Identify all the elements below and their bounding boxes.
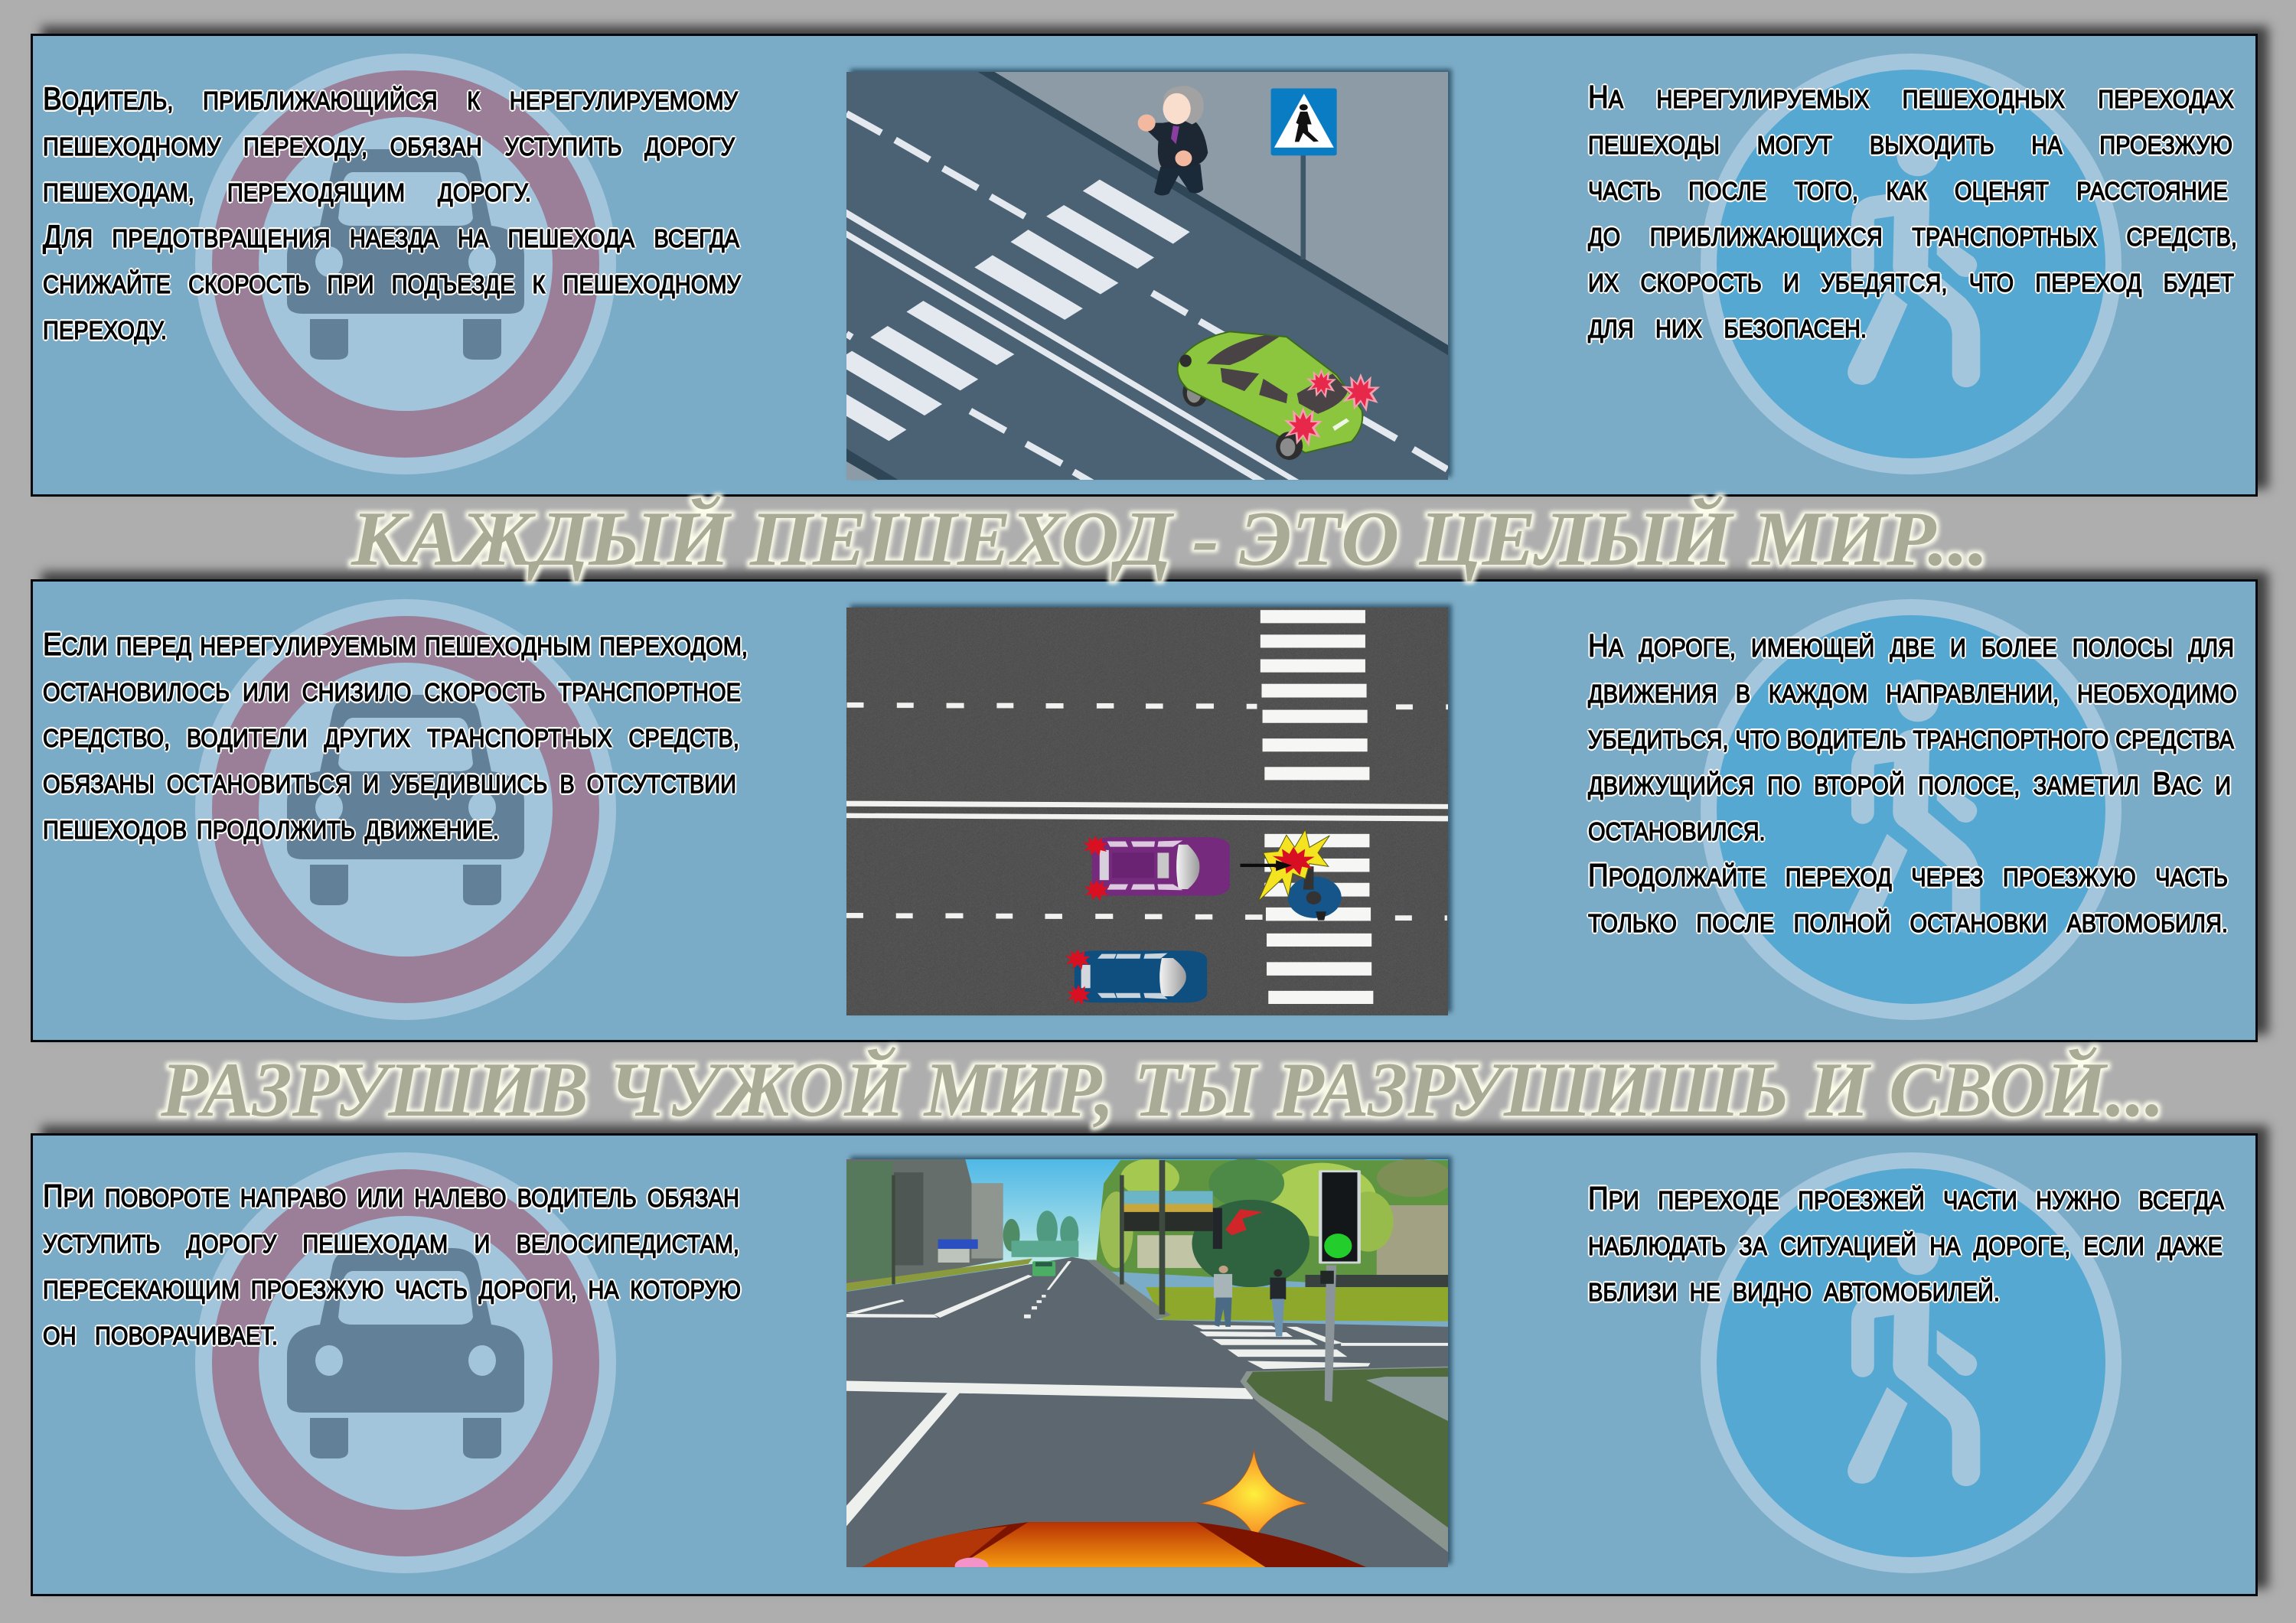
illustration: top-down road with two cars and struck pedestrian [846,608,1448,1015]
text block: turning rule: ПЕРЕСЕКАЮЩИМ ПРОЕЗЖУЮ ЧАСТЬ ДОРОГИ, НА КОТОРУЮ [43,1276,741,1304]
panel: multi-lane crossing [31,579,2258,1042]
text block: pedestrian rule: ПЕШЕХОДЫ МОГУТ ВЫХОДИТЬ НА ПРОЕЗЖУЮ [1588,131,2232,159]
text block: stopped vehicle rule: ПЕШЕХОДОВ ПРОДОЛЖИТЬ ДВИЖЕНИЕ. [43,816,499,844]
text block: stopped vehicle rule: ОСТАНОВИЛОСЬ ИЛИ СНИЗИЛО СКОРОСТЬ ТРАНСПОРТНОЕ [43,678,741,706]
text block: two-lane crossing rule: НА ДОРОГЕ, ИМЕЮЩЕЙ ДВЕ И БОЛЕЕ ПОЛОСЫ ДЛЯ [1588,627,2234,663]
text block: observe the road rule: ВБЛИЗИ НЕ ВИДНО АВТОМОБИЛЕЙ. [1588,1278,2000,1306]
sidewalk and curb [846,72,1448,480]
asphalt [846,1257,1448,1567]
text block: two-lane crossing rule: ТОЛЬКО ПОСЛЕ ПОЛНОЙ ОСТАНОВКИ АВТОМОБИЛЯ. [1588,909,2228,937]
text block: two-lane crossing rule: УБЕДИТЬСЯ, ЧТО ВОДИТЕЛЬ ТРАНСПОРТНОГО СРЕДСТВА [1588,725,2234,754]
title: every pedestrian is a whole world: КАЖДЫЙ ПЕШЕХОД - ЭТО ЦЕЛЫЙ МИР... [351,495,1988,582]
text block: stopped vehicle rule: ЕСЛИ ПЕРЕД НЕРЕГУЛИРУЕМЫМ ПЕШЕХОДНЫМ ПЕРЕХОДОМ, [43,626,748,662]
text block: turning rule: ПРИ ПОВОРОТЕ НАПРАВО ИЛИ НАЛЕВО ВОДИТЕЛЬ ОБЯЗАН [43,1178,739,1214]
illustration: isometric road with pedestrian and green car [846,72,1448,480]
far green car [1032,1261,1055,1276]
text block: driver rule: ВОДИТЕЛЬ, ПРИБЛИЖАЮЩИЙСЯ К НЕРЕГУЛИРУЕМОМУ [43,80,738,116]
road markings [846,1261,1448,1526]
sky and backdrop [846,1159,1452,1290]
icon: pedestrian sign watermark [1701,54,2122,474]
text block: two-lane crossing rule: ДВИЖУЩИЙСЯ ПО ВТОРОЙ ПОЛОСЕ, ЗАМЕТИЛ ВАС И [1588,765,2231,801]
text block: driver rule: ДЛЯ ПРЕДОТВРАЩЕНИЯ НАЕЗДА НА ПЕШЕХОДА ВСЕГДА [43,218,739,254]
lane markings [846,702,1448,921]
title: destroying another's world destroys your own: РАЗРУШИВ ЧУЖОЙ МИР, ТЫ РАЗРУШИШЬ И СВОЙ... [160,1046,2164,1133]
red car hood [863,1522,1366,1574]
text block: two-lane crossing rule: ОСТАНОВИЛСЯ. [1588,817,1766,846]
pedestrian seen from above [1287,866,1342,921]
illustration: street view with traffic light, pedestrians and car hood [846,1159,1448,1567]
text block: driver rule: ПЕШЕХОДАМ, ПЕРЕХОДЯЩИМ ДОРОГУ. [43,178,531,207]
text block: observe the road rule: НАБЛЮДАТЬ ЗА СИТУАЦИЕЙ НА ДОРОГЕ, ЕСЛИ ДАЖЕ [1588,1232,2223,1260]
blue car with red bursts [1065,949,1207,1005]
billboard and far sign [1124,1191,1264,1249]
text block: observe the road rule: ПРИ ПЕРЕХОДЕ ПРОЕЗЖЕЙ ЧАСТИ НУЖНО ВСЕГДА [1588,1180,2224,1216]
impact explosion and arrow [1240,829,1329,901]
two pedestrians at crossing [1214,1266,1286,1336]
text block: two-lane crossing rule: ПРОДОЛЖАЙТЕ ПЕРЕХОД ЧЕРЕЗ ПРОЕЗЖУЮ ЧАСТЬ [1588,857,2228,893]
panel: driver approaching a crossing [31,34,2258,497]
text block: driver rule: ПЕШЕХОДНОМУ ПЕРЕХОДУ, ОБЯЗАН УСТУПИТЬ ДОРОГУ [43,132,735,161]
panel: turning at an intersection [31,1133,2258,1596]
grass and far curb [846,1259,1448,1322]
pedestrian figure in a suit [1138,86,1208,196]
text block: driver rule: ПЕРЕХОДУ. [43,316,167,344]
text block: observe the road rule [1587,1180,2226,1309]
icon: orange four-point attention star [1200,1449,1307,1539]
text block: driver rule [41,80,743,347]
icon: pedestrian crossing road sign [1271,88,1337,259]
text block: turning rule: УСТУПИТЬ ДОРОГУ ПЕШЕХОДАМ И ВЕЛОСИПЕДИСТАМ, [43,1230,739,1258]
icon: no-cars sign watermark [195,599,616,1020]
icon: pedestrian sign watermark [1701,599,2122,1020]
text block: pedestrian rule: НА НЕРЕГУЛИРУЕМЫХ ПЕШЕХОДНЫХ ПЕРЕХОДАХ [1588,79,2234,115]
lamp posts [892,1160,1165,1315]
kerb island with grass [1240,1367,1448,1552]
zebra stripes [1261,610,1373,1004]
traffic light with green signal [1319,1170,1361,1402]
icon: no-cars sign watermark [195,54,616,474]
text block: stopped vehicle rule [41,626,748,846]
text block: pedestrian rule: ДЛЯ НИХ БЕЗОПАСЕН. [1588,314,1867,343]
road markings [798,113,1447,483]
text block: turning rule: ОН ПОВОРАЧИВАЕТ. [43,1322,278,1350]
icon: no-cars sign watermark [195,1152,616,1573]
text block: two-lane crossing rule: ДВИЖЕНИЯ В КАЖДОМ НАПРАВЛЕНИИ, НЕОБХОДИМО [1588,680,2237,708]
text block: stopped vehicle rule: ОБЯЗАНЫ ОСТАНОВИТЬСЯ И УБЕДИВШИСЬ В ОТСУТСТВИИ [43,770,736,798]
text block: stopped vehicle rule: СРЕДСТВО, ВОДИТЕЛИ ДРУГИХ ТРАНСПОРТНЫХ СРЕДСТВ, [43,724,739,752]
text block: pedestrian rule: ДО ПРИБЛИЖАЮЩИХСЯ ТРАНСПОРТНЫХ СРЕДСТВ, [1588,223,2237,251]
icon: pedestrian sign watermark [1701,1152,2122,1573]
green car with red hazard bursts [1178,331,1380,460]
text block: two-lane crossing rule [1586,627,2238,937]
purple car with red bursts [1083,836,1230,901]
text block: turning rule [41,1178,742,1350]
text block: pedestrian rule [1586,79,2237,345]
text block: driver rule: СНИЖАЙТЕ СКОРОСТЬ ПРИ ПОДЪЕЗДЕ К ПЕШЕХОДНОМУ [43,270,741,298]
text block: pedestrian rule: ИХ СКОРОСТЬ И УБЕДЯТСЯ, ЧТО ПЕРЕХОД БУДЕТ [1588,269,2234,297]
text block: pedestrian rule: ЧАСТЬ ПОСЛЕ ТОГО, КАК ОЦЕНЯТ РАССТОЯНИЕ [1588,177,2228,205]
